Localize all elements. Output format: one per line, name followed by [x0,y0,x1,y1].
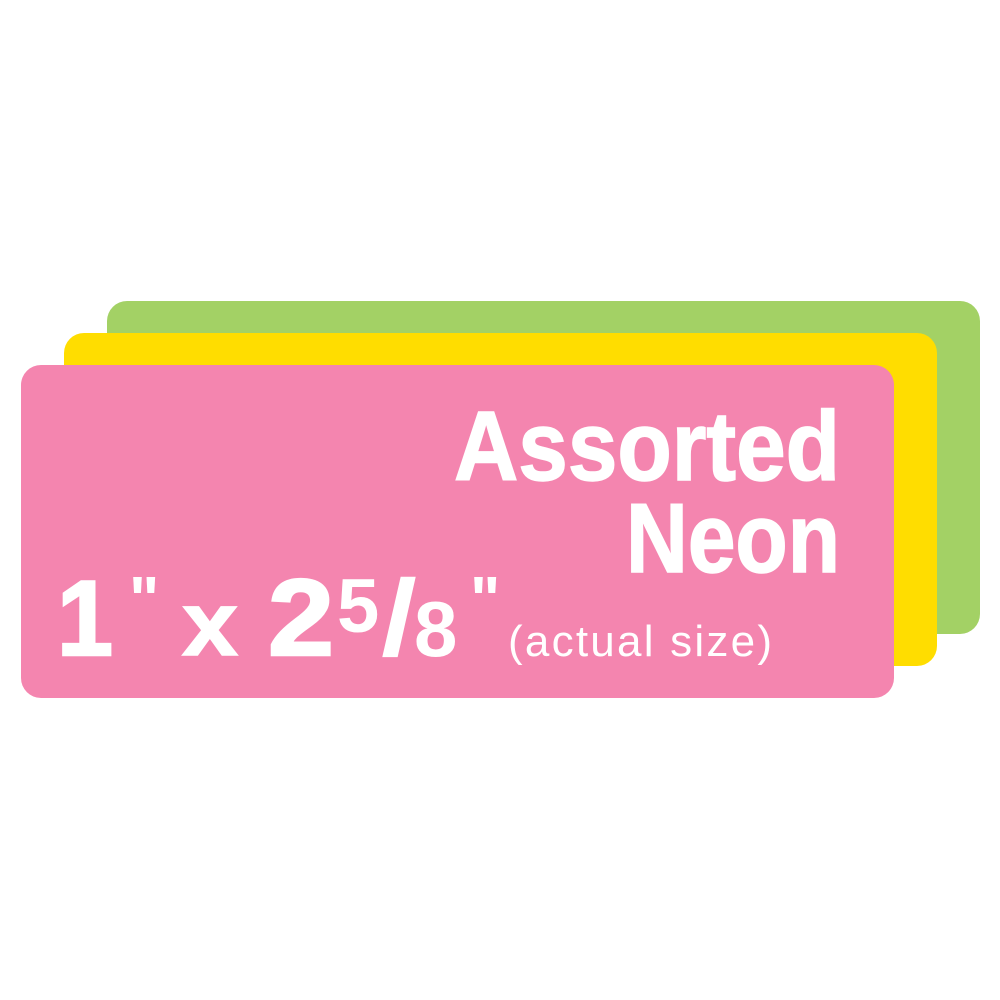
note: actual size: (actual size) [508,617,772,666]
size text: 1 inch x 2 5/8 inch: " [129,563,159,635]
heading: Neon: Neon [626,483,840,593]
label: yellow middle card [64,333,937,666]
label: green back card [107,301,980,634]
label: pink front card [21,365,894,698]
size text: 1 inch x 2 5/8 inch: / [381,557,417,678]
size text: 1 inch x 2 5/8 inch: 1 [57,558,113,678]
size text: 1 inch x 2 5/8 inch: 8 [414,585,457,673]
size text: 1 inch x 2 5/8 inch: 2 [268,557,334,679]
heading: Assorted: Assorted [454,391,840,501]
size text: 1 inch x 2 5/8 inch: 5 [337,564,379,649]
size text: 1 inch x 2 5/8 inch: x [182,574,238,675]
size text: 1 inch x 2 5/8 inch: " [470,563,500,635]
size text: 1 inch x 2 5/8 inch [57,557,500,679]
